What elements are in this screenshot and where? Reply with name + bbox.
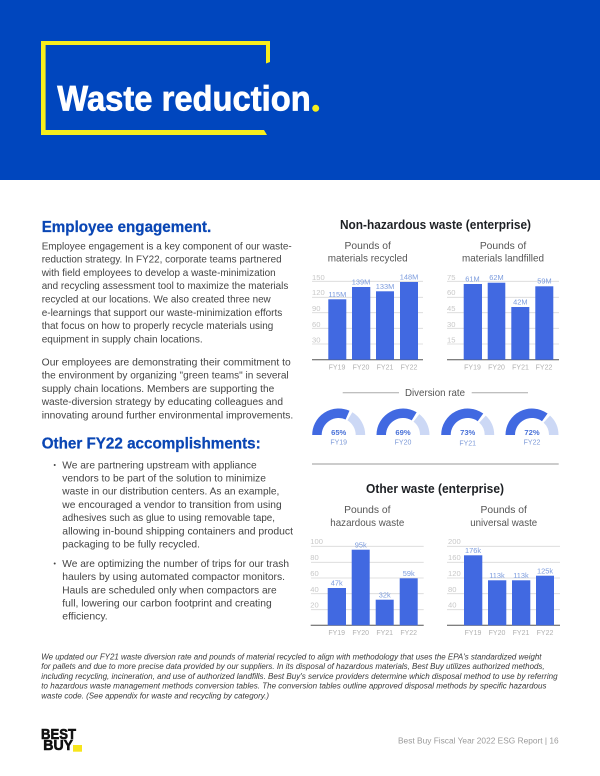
chart: pounds of materials recycled: FY19	[329, 364, 345, 372]
chart: pounds of hazardous waste: FY20	[352, 630, 369, 637]
chart: pounds of materials recycled: Pounds of	[345, 241, 391, 252]
heading: other accomplishments: Other FY22 accomplishments:	[42, 435, 261, 452]
heading: diversion rate: Diversion rate	[405, 388, 465, 399]
footnote: for pallets and due to more precise data provided by our suppliers. In its disposal of hazardous materials, Best Buy utilizes authorized methods,	[41, 662, 545, 671]
gauge: FY19 65%: FY19	[330, 440, 347, 446]
chart: pounds of materials recycled: FY21	[377, 364, 393, 372]
chart: pounds of universal waste: Pounds of	[481, 505, 527, 516]
chart: pounds of universal waste	[447, 505, 560, 637]
bullet list: accomplishments: adhesives such as glue to using removable tape,	[62, 513, 275, 524]
chart: pounds of materials landfilled: Pounds of	[480, 241, 526, 252]
chart: pounds of hazardous waste: 95k	[355, 540, 367, 550]
bullet list: accomplishments: packaging to be fully recycled.	[62, 540, 200, 550]
chart: pounds of materials recycled	[312, 241, 423, 372]
text block: employee engagement body: equipment in supply chain locations.	[42, 334, 203, 345]
chart: pounds of hazardous waste: hazardous waste	[330, 518, 405, 529]
chart: pounds of universal waste: 125k	[537, 566, 553, 576]
chart: pounds of materials landfilled: 75	[447, 273, 455, 282]
chart: pounds of materials recycled: 30	[312, 336, 320, 345]
chart: pounds of materials landfilled: 60	[447, 288, 455, 297]
heading: other waste: Other waste (enterprise)	[366, 482, 504, 496]
chart: pounds of hazardous waste: 32k	[379, 590, 391, 600]
gauge: FY20 69%	[381, 413, 425, 446]
chart: pounds of hazardous waste: 20	[310, 601, 319, 610]
chart: pounds of hazardous waste: FY22	[400, 630, 417, 637]
heading: non-hazardous waste: Non-hazardous waste (enterprise)	[340, 218, 531, 232]
chart: pounds of universal waste: FY22	[537, 630, 553, 637]
chart: pounds of materials landfilled: 61M	[465, 274, 480, 284]
title full stop: .	[312, 94, 318, 116]
chart: pounds of hazardous waste: FY19	[328, 630, 345, 637]
chart: pounds of materials recycled: 148M	[400, 272, 418, 282]
gauge: FY22 72%: FY22	[524, 440, 540, 446]
footnote: We updated our FY21 waste diversion rate and pounds of material recycled to align with methodology that uses the EPA's standardized weight	[41, 652, 542, 661]
text block: employee engagement body: supply chain locations. Members are supporting the	[42, 384, 275, 395]
chart: pounds of universal waste: 40	[448, 601, 456, 610]
chart: pounds of universal waste: 113k	[489, 571, 505, 580]
chart: pounds of materials recycled: 60	[312, 320, 320, 329]
chart: pounds of materials recycled: 133M	[376, 282, 394, 291]
gauge: FY21 73%	[446, 413, 489, 448]
gauge: FY22 72%	[510, 413, 554, 446]
chart: pounds of universal waste: 200	[448, 537, 461, 546]
text block: employee engagement body: reduction strategy. In FY22, corporate teams partnered	[42, 255, 282, 266]
chart: pounds of universal waste: 176k	[465, 546, 481, 555]
chart: pounds of universal waste: FY19	[465, 630, 481, 637]
chart: pounds of hazardous waste: Pounds of	[344, 505, 391, 516]
icon: Best Buy logo: BUY	[43, 738, 73, 754]
footnote: including recycling, incineration, and use of authorized landfills. Best Buy's service providers determine which disposal method to use by referring	[41, 672, 558, 681]
chart: pounds of universal waste: 113k	[513, 571, 529, 580]
title: Waste reduction	[57, 79, 311, 119]
gauge: FY21 73%: FY21	[459, 440, 476, 448]
bullet list: accomplishments: efficiency.	[62, 612, 108, 623]
chart: pounds of materials recycled: materials recycled	[328, 254, 408, 265]
chart: pounds of hazardous waste: 60	[310, 569, 319, 578]
text block: employee engagement body: innovating around further environmental improvements.	[42, 410, 293, 422]
bullet list: accomplishments	[54, 460, 293, 623]
footnote	[41, 652, 558, 700]
text block: employee engagement body: Our employees are demonstrating their commitment to	[42, 357, 291, 368]
chart: pounds of materials recycled: 90	[312, 304, 320, 313]
chart: pounds of hazardous waste: 100	[310, 537, 323, 546]
text block: employee engagement body: with field employees to develop a waste-minimization	[41, 268, 276, 279]
chart: pounds of materials landfilled: 59M	[537, 276, 552, 286]
chart: pounds of hazardous waste: 59k	[403, 569, 415, 578]
bullet list: accomplishments: we encouraged a vendor to transition from using	[61, 500, 282, 511]
chart: pounds of universal waste: FY20	[489, 630, 505, 637]
chart: pounds of universal waste: 120	[448, 569, 461, 578]
chart: pounds of materials recycled: 150	[312, 273, 325, 282]
gauge: FY19 65%: 65%	[331, 428, 347, 437]
bullet list: accomplishments: We are optimizing the number of trips for our trash	[62, 559, 289, 570]
chart: pounds of materials landfilled: 62M	[489, 273, 504, 282]
text block: employee engagement body: Employee engagement is a key component of our waste-	[42, 241, 292, 252]
bullet list: accomplishments: waste in our distribution centers. As an example,	[61, 487, 279, 498]
yellow title frame	[41, 41, 270, 135]
chart: pounds of materials landfilled: FY19	[464, 364, 481, 372]
chart: pounds of materials landfilled: FY21	[512, 364, 529, 372]
chart: pounds of materials recycled: 120	[312, 288, 325, 297]
bullet list: accomplishments: full, lowering our carbon footprint and creating	[62, 598, 272, 610]
chart: pounds of materials recycled: FY20	[353, 364, 369, 372]
chart: pounds of materials landfilled: 30	[447, 320, 455, 329]
text block: employee engagement body: waste-diversion strategy by educating colleagues and	[41, 397, 283, 408]
bullet list: accomplishments: haulers by using automated compactor monitors.	[62, 572, 285, 583]
chart: pounds of materials landfilled	[447, 241, 559, 372]
text block: employee engagement body: e-learnings that support our waste-minimization efforts	[42, 308, 282, 319]
gauge: FY20 69%: 69%	[395, 428, 411, 437]
chart: pounds of materials landfilled: 42M	[513, 298, 527, 306]
footnote: to hazardous waste management methods conversion tables. The conversion tables outline approved disposal methods by specific hazardous	[41, 682, 547, 690]
chart: pounds of universal waste: 80	[448, 585, 456, 594]
heading: employee engagement: Employee engagement.	[42, 219, 211, 236]
icon: Best Buy logo	[41, 727, 82, 754]
chart: pounds of materials landfilled: 15	[447, 336, 455, 345]
header banner	[0, 0, 600, 180]
chart: pounds of universal waste: universal waste	[470, 518, 537, 529]
chart: pounds of materials landfilled: 45	[447, 304, 455, 313]
bullet list: accomplishments: We are partnering upstream with appliance	[62, 460, 257, 471]
text block: employee engagement body: the environment by organizing "green teams" in several	[42, 371, 289, 382]
gauge: FY20 69%: FY20	[395, 440, 411, 446]
chart: pounds of materials landfilled: FY20	[488, 364, 505, 372]
chart: pounds of universal waste: 160	[448, 553, 461, 562]
gauge: FY21 73%: 73%	[460, 428, 476, 437]
icon: Best Buy logo: BEST	[41, 727, 76, 743]
chart: pounds of hazardous waste	[310, 505, 424, 637]
bullet list: accomplishments: allowing in-bound shipping containers and product	[62, 526, 293, 537]
text block: employee engagement body: recycled at our locations. We also created three new	[42, 294, 271, 306]
chart: pounds of hazardous waste: 80	[310, 553, 319, 562]
gauge: FY19 65%	[317, 413, 360, 446]
chart: pounds of hazardous waste: FY21	[376, 630, 393, 637]
footer: report name and page number: Best Buy Fiscal Year 2022 ESG Report | 16	[398, 736, 559, 746]
chart: pounds of materials recycled: FY22	[401, 364, 417, 372]
bullet list: accomplishments: vendors to be part of the solution to minimize	[62, 474, 266, 484]
chart: pounds of materials landfilled: materials landfilled	[462, 254, 544, 265]
chart: pounds of materials landfilled: FY22	[536, 364, 552, 372]
text block: employee engagement body: that focus on how to properly recycle materials using	[42, 321, 274, 332]
chart: pounds of universal waste: FY21	[513, 630, 529, 637]
gauge: FY22 72%: 72%	[524, 428, 540, 437]
footnote: waste code. (See appendix for waste and recycling by category.)	[41, 691, 269, 700]
chart: pounds of hazardous waste: 47k	[331, 578, 343, 588]
text block: employee engagement body	[41, 241, 293, 422]
text block: employee engagement body: and recycling assessment tool to maximize the materials	[42, 281, 288, 292]
bullet list: accomplishments: Hauls are scheduled only when compactors are	[62, 585, 277, 596]
chart: pounds of hazardous waste: 40	[310, 585, 319, 594]
chart: pounds of materials recycled: 139M	[352, 278, 370, 286]
chart: pounds of materials recycled: 115M	[328, 290, 346, 299]
